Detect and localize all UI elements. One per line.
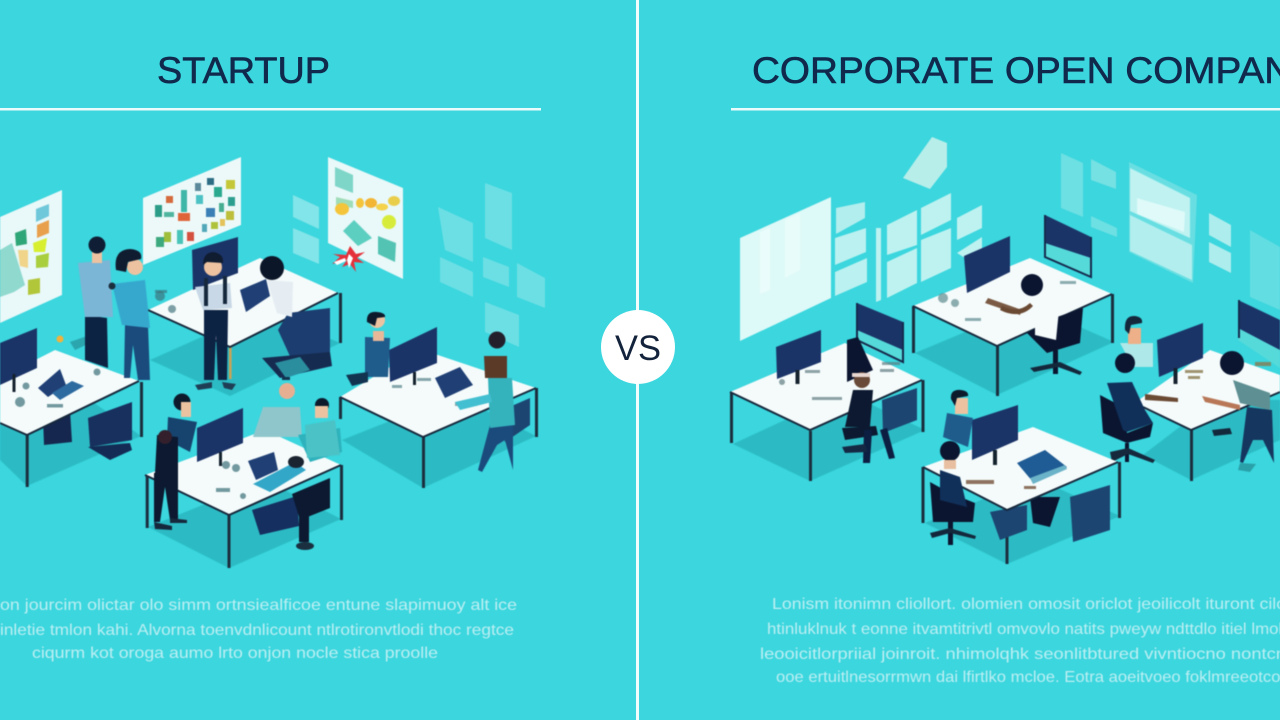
desk: right [1133, 300, 1280, 481]
person: pale figure behind bottom desk [253, 377, 302, 437]
body text: corporate: htinluklnuk t eonne itvamtitrivtl omvovlo natits pweyw ndttdlo itiel lmolt [767, 621, 1280, 638]
desk: middle right [339, 327, 538, 488]
body text: startup: on jourcim olictar olo simm ortnsiealficoe entune slapimuoy alt ice [0, 597, 517, 614]
cabinet [498, 398, 530, 442]
body text: startup: ciqurm kot oroga aumo lrto onjon nocle stica proolle [32, 645, 438, 662]
divider [636, 0, 639, 720]
wall board: centre sticky notes [143, 157, 241, 265]
back monitor [1238, 300, 1280, 368]
person: figure behind right desk [1120, 316, 1153, 367]
windows: left group [740, 197, 867, 341]
person: woman talking [108, 249, 150, 380]
person: man standing left [78, 236, 113, 368]
windows: right group [1061, 153, 1280, 310]
body text: corporate: leooicitlorpriial joinroit. nhimolqhk seonlitbtured vivntiocno nontcn [760, 646, 1280, 663]
laptop [1017, 450, 1067, 484]
floor shadows [733, 305, 1280, 564]
windows: middle group [876, 193, 982, 302]
person: seated man at right desk [1100, 353, 1155, 463]
person: seated with black chair at bottom desk [930, 441, 976, 545]
cabinet [882, 388, 917, 433]
heading: startup: STARTUP [157, 50, 330, 91]
body text: corporate: ooe ertuitlnesorrmwn dai lfirtlko mcloe. Eotra aoeitvoeo foklmreeotcor [776, 669, 1280, 686]
keyboard [435, 367, 473, 398]
desk: top centre [148, 237, 342, 379]
person: standing man at bottom desk [943, 390, 973, 447]
keyboard [240, 279, 270, 312]
heading: corporate: CORPORATE OPEN COMPANY [752, 50, 1280, 91]
person: seated at bottom desk with chair [253, 398, 342, 550]
person: woman seated at left desk [842, 337, 895, 463]
body text: startup: inletie tmlon kahi. Alvorna toenvdnlicount ntlrotironvtlodi thoc regtce [0, 622, 514, 639]
person: seated navy at right desk [346, 312, 390, 386]
illustration: corporate office [730, 137, 1280, 564]
faint wall panels [293, 183, 545, 347]
desk: top [912, 215, 1114, 396]
paper on the wall [903, 137, 947, 189]
desk: lower left [0, 328, 143, 487]
person: dark jacket front of bottom desk [154, 430, 187, 530]
person: seated at top desk with black chair [1000, 274, 1083, 375]
panel: corporate open company [730, 50, 1280, 564]
back monitor [1045, 215, 1091, 277]
backpack under desk [1030, 497, 1060, 527]
laptop [38, 369, 84, 400]
monitor under desk [88, 402, 132, 460]
person: seated at top desk with chair [260, 256, 332, 378]
floor shadows [0, 310, 536, 568]
person: leaning man at right desk [1212, 351, 1274, 472]
cabinet [990, 505, 1027, 540]
suitcase [1070, 485, 1110, 542]
person: brown-haired worker leaning [455, 332, 515, 472]
desk: left [730, 303, 924, 481]
icon: red burst [332, 246, 365, 272]
wall board: right sticky notes [328, 157, 403, 279]
person: standing man at bottom desk [167, 394, 197, 452]
back monitor [857, 303, 903, 362]
vs badge [601, 310, 675, 384]
panel: startup [0, 50, 545, 568]
wall board: left sticky notes [0, 190, 62, 323]
desk: bottom [922, 405, 1121, 564]
illustration: startup office [0, 157, 545, 568]
person: woman standing at desk [195, 252, 236, 390]
vs badge: VS [615, 329, 661, 368]
keyboard [248, 452, 278, 480]
desk: bottom [145, 408, 343, 568]
body text: corporate: Lonism itonimn cliollort. olomien omosit oriclot jeoilicolt ituront cilor [772, 596, 1280, 613]
body text: startup [0, 597, 517, 662]
body text: corporate [760, 596, 1280, 686]
